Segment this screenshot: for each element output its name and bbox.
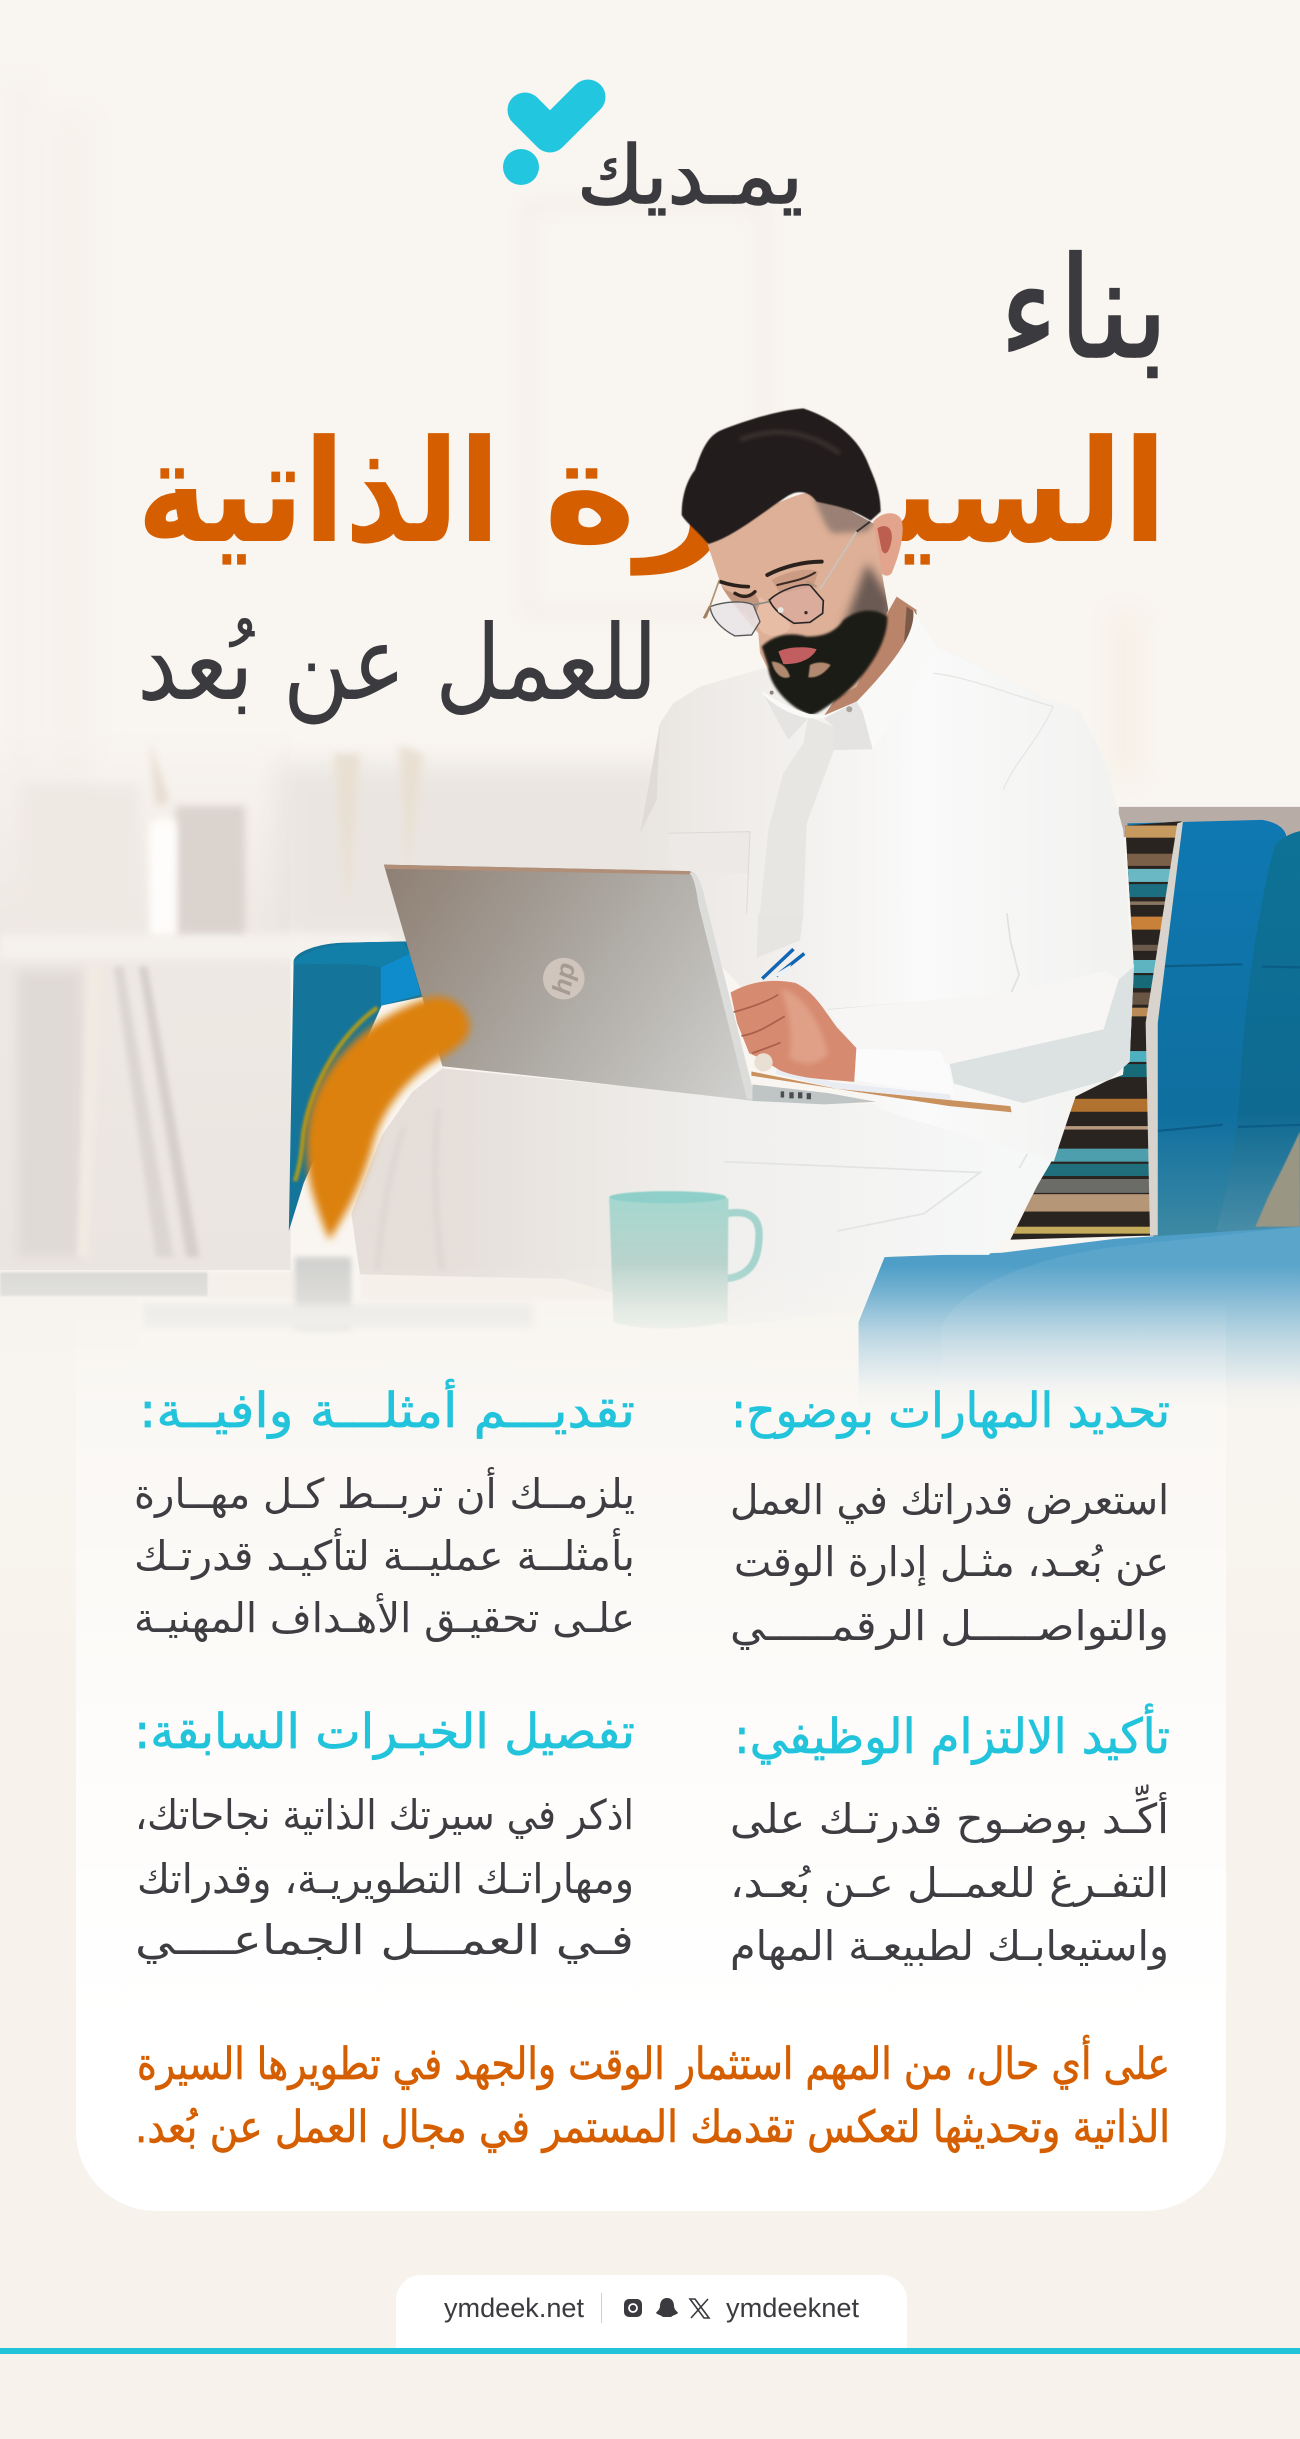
body text: علـى تحقيـق الأهـداف المهنيـة <box>134 1592 635 1642</box>
sofa seat <box>859 1227 1300 1409</box>
icon: instagram <box>624 2299 642 2317</box>
title line 2: ـرة <box>543 410 792 576</box>
closing statement <box>135 2035 1170 2153</box>
pillow edge <box>1146 822 1183 1235</box>
body text: فـي العمـــل الجماعــــي <box>135 1916 634 1965</box>
striped pillow <box>1002 821 1188 1244</box>
body text: ومهاراتـك التطويريـة، وقدراتك <box>137 1855 634 1903</box>
title line 2: الذاتية <box>137 410 500 575</box>
body text: أكِّـد بوضـوح قدرتـك على <box>730 1784 1169 1843</box>
hand <box>731 981 856 1082</box>
laptop <box>384 865 876 1104</box>
face <box>706 493 888 695</box>
body text: والتواصـــــل الرقمـــــي <box>730 1602 1169 1651</box>
body text: بأمثلــة عمليــة لتأكيـد قدرتـك <box>134 1528 635 1580</box>
body text <box>730 1476 1169 1651</box>
logo wordmark: يمـديك <box>577 129 803 222</box>
neck <box>823 597 917 717</box>
social handle: ymdeeknet <box>726 2293 859 2323</box>
body text: واستيعابـك لطبيعـة المهام <box>730 1922 1169 1970</box>
ear <box>867 513 903 576</box>
torso lower <box>633 771 1134 1162</box>
tip: previous experience <box>134 1704 635 1965</box>
room furniture left <box>0 728 668 1350</box>
pen <box>762 949 804 979</box>
mug <box>609 1191 759 1329</box>
clipboard and papers <box>751 1068 1012 1112</box>
body text: التفـرغ للعمــل عـن بُعـد، <box>730 1859 1169 1907</box>
legs and thobe lower <box>351 1068 1076 1326</box>
heading: تفصيل الخبـرات السابقة: <box>134 1704 635 1760</box>
body text: استعرض قدراتك في العمل <box>730 1476 1169 1525</box>
upper shirt <box>640 647 1128 913</box>
blurred room background <box>10 80 1140 1140</box>
bottom fade over photo <box>0 1265 1300 1410</box>
logo <box>503 97 803 222</box>
shirt collar <box>762 610 938 750</box>
title line 2: السيـ <box>845 410 1167 575</box>
heading: تقديـــم أمثلـــة وافيــة: <box>139 1379 635 1439</box>
beard <box>762 611 887 715</box>
shirt cuff <box>854 1049 954 1094</box>
sofa arm <box>289 941 423 1231</box>
feather <box>295 997 470 1240</box>
body text <box>134 1467 635 1642</box>
footer line <box>0 2348 1300 2354</box>
tip: sufficient examples <box>134 1379 635 1642</box>
sofa back <box>1002 807 1300 1244</box>
tip: clear skills <box>730 1383 1170 1651</box>
body text <box>730 1784 1169 1970</box>
laptop base <box>752 1084 876 1104</box>
body text: اذكر في سيرتك الذاتية نجاحاتك، <box>135 1791 634 1840</box>
website: ymdeek.net <box>444 2293 584 2323</box>
title line 2 <box>137 410 1167 576</box>
icon: check mark and dot <box>503 97 588 185</box>
glasses <box>704 522 870 636</box>
tip: job commitment <box>730 1703 1170 1970</box>
icon: x <box>690 2299 709 2318</box>
body text <box>135 1791 634 1965</box>
lower background <box>0 1410 1300 2439</box>
body text: عن بُعـد، مثـل إدارة الوقت <box>734 1538 1169 1586</box>
footer pill <box>396 2275 907 2350</box>
shirt placket <box>760 717 834 913</box>
heading: تأكيد الالتزام الوظيفي: <box>734 1703 1170 1765</box>
heading: تحديد المهارات بوضوح: <box>731 1383 1170 1439</box>
title line 1: بناء <box>999 228 1169 391</box>
title line 3: للعمل عن بُعد <box>137 602 658 725</box>
icon: snapchat <box>656 2298 678 2317</box>
man <box>295 408 1134 1329</box>
closing statement: الذاتية وتحديثها لتعكس تقدمك المستمر في مجال العمل عن بُعد. <box>135 2102 1170 2153</box>
title <box>137 228 1169 725</box>
hair <box>682 408 881 544</box>
body text: يلزمــك أن تربــط كـل مهــارة <box>134 1467 635 1518</box>
eyes and brows <box>720 562 822 596</box>
laptop logo: hp <box>546 960 581 997</box>
white content panel <box>76 1295 1226 2211</box>
cushion on right <box>1255 1131 1300 1227</box>
